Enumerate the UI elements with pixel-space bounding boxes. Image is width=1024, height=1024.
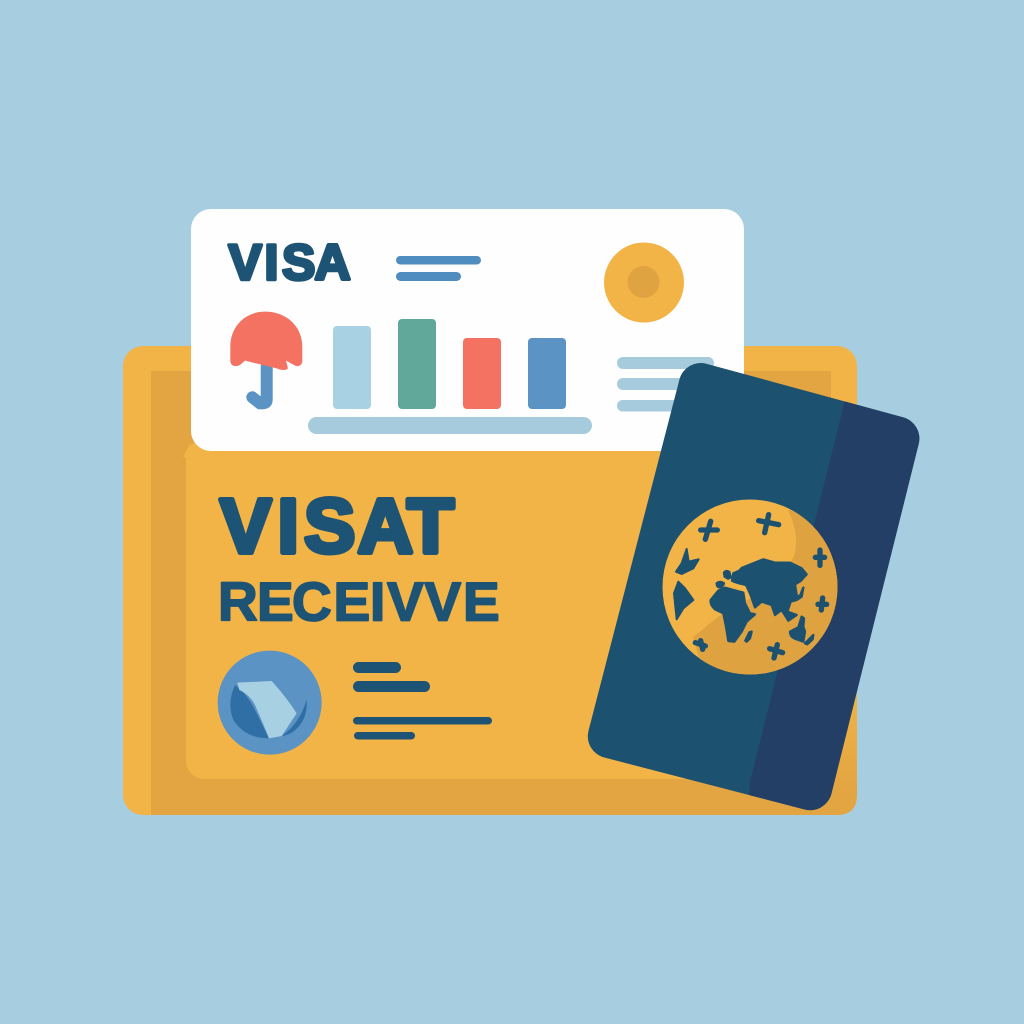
folder outer body [123,346,857,815]
header lines [396,256,481,281]
continents: Americas [674,549,699,619]
panel: white visa card [191,209,744,451]
icon: umbrella [230,312,302,403]
card text lines [617,357,714,412]
globe disc [662,500,838,674]
chart baseline [308,417,592,434]
passport cover [588,363,919,810]
passport spine band [748,401,920,810]
icon: blue map badge [218,651,322,755]
card heading: VISA: VISA [228,234,351,290]
globe shadow [693,510,838,674]
continents: Eurasia, Africa, Australia [711,559,813,644]
folder inner recess [151,371,857,815]
bar chart [333,319,566,409]
card body [191,209,744,451]
folder front notch [183,444,200,460]
infographic illustration [123,209,920,815]
globe emblem [662,500,838,674]
panel: passport [588,363,920,810]
folder right edge shade [831,680,857,790]
folder front panel [186,440,800,779]
stars around globe [695,515,827,658]
subheading: RECEIVVE: RECEIVVE [218,570,500,632]
heading: VISAT: VISAT [220,484,454,570]
icon: gold coin [604,242,684,322]
text lines beside badge [353,662,492,740]
panel: yellow folder [123,346,857,815]
